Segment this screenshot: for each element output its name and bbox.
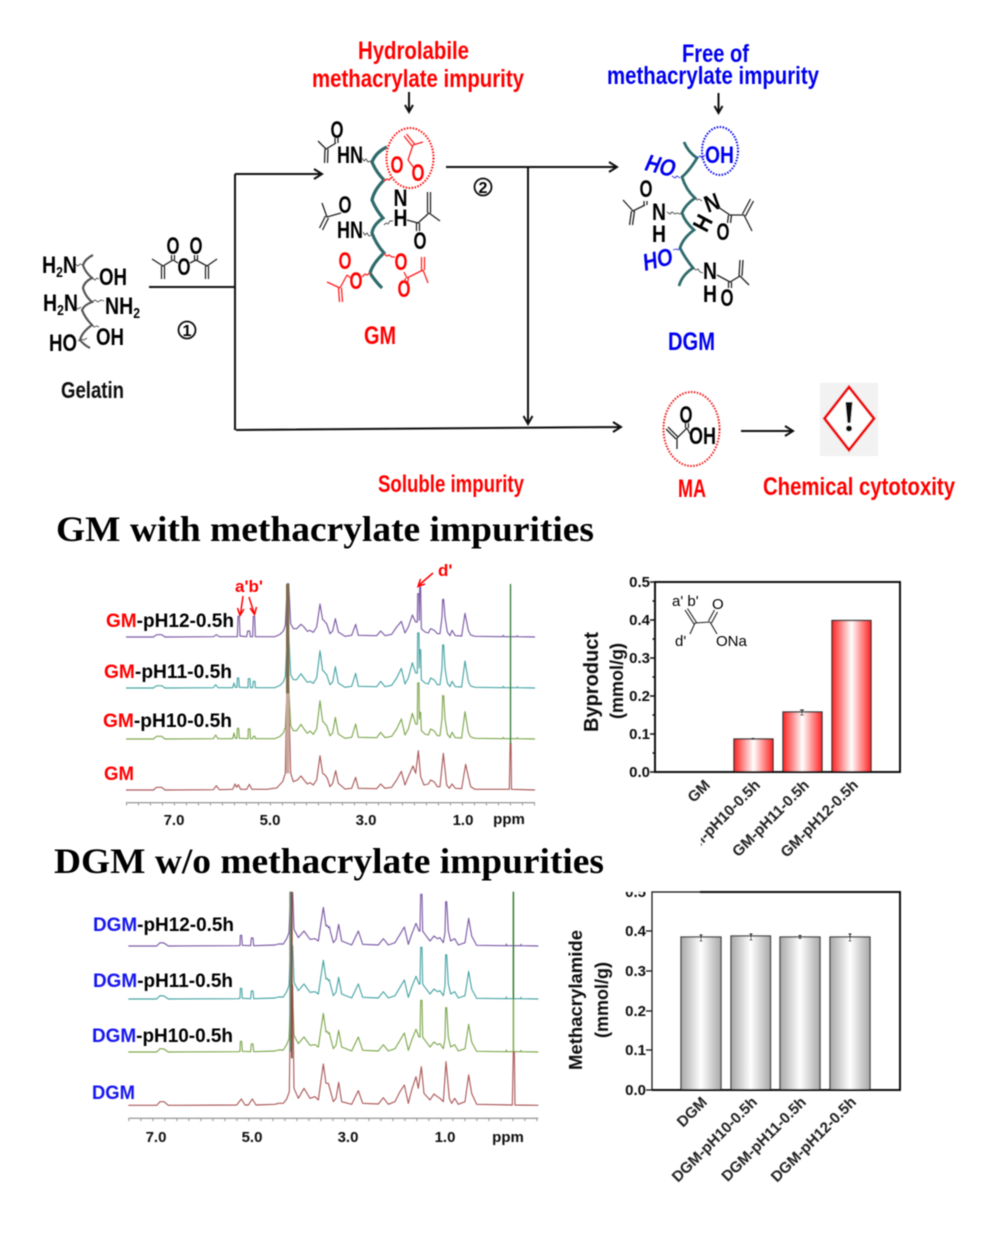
inset: sodium methacrylate structure: O: [712, 596, 724, 613]
chart: byproduct bar chart: [581, 574, 900, 861]
molecule: DGM: N: [703, 258, 717, 285]
spectrum: DGM-pH10: [128, 999, 538, 1052]
chart: DGM NMR spectra: [92, 892, 538, 1146]
molecule: methacrylic anhydride: O: [190, 233, 202, 260]
y-axis tick labels: 0.3: [625, 963, 646, 980]
y-axis tick labels: [629, 574, 651, 781]
x-axis labels: DGM-pH12-0.5h: [768, 1094, 860, 1186]
y-axis tick labels: 0.0: [625, 1082, 646, 1099]
chart: GM NMR spectra: [103, 561, 535, 829]
molecule: gelatin: H: [42, 252, 59, 279]
callout: free hydroxyl circle: [702, 127, 738, 175]
x-axis labels: GM-pH10-0.5h: [680, 777, 764, 861]
callout: free hydroxyl circle: OH: [705, 142, 734, 169]
y-axis title: (mmol/g): [592, 962, 612, 1038]
molecule: DGM: [623, 127, 754, 312]
y-axis tick labels: 0.2: [629, 688, 650, 705]
icon: step 1: 1: [183, 323, 192, 340]
y-axis title: (mmol/g): [607, 643, 627, 719]
axis labels: ppm scale: 1.0: [435, 1129, 455, 1146]
y-axis tick labels: [625, 884, 647, 1099]
heading: hydrolabile methacrylate impurity: Hydrolabile: [358, 37, 469, 65]
inset: sodium methacrylate structure: d': [675, 633, 686, 650]
molecule: gelatin: N: [64, 290, 78, 317]
y-axis title: Byproduct: [581, 632, 603, 732]
label: GM-pH11-0.5h: GM-pH11-0.5h: [104, 661, 232, 683]
molecule: DGM: N: [701, 188, 724, 219]
spectrum: DGM-pH11: [128, 946, 538, 999]
molecule: DGM: O: [720, 285, 734, 312]
molecule: gelatin: [42, 252, 140, 357]
label: DGM-pH12-0.5h: DGM-pH12-0.5h: [93, 914, 234, 936]
callout: hydrolabile ester circle: [384, 128, 434, 188]
molecule: DGM: O: [716, 219, 730, 246]
y-axis title: Methacrylamide: [566, 930, 586, 1070]
bars: [734, 620, 871, 772]
molecule: gelatin: N: [63, 252, 77, 279]
title: GM with methacrylate impurities: GM with methacrylate impurities: [56, 509, 594, 549]
callout: hydrolabile ester circle: O: [412, 160, 424, 187]
y-axis tick labels: 0.4: [625, 923, 647, 940]
axis labels: ppm scale: 7.0: [164, 812, 184, 829]
y-axis tick labels: 0.3: [629, 650, 650, 667]
heading: free of methacrylate impurity: methacrylate impurity: [607, 62, 819, 90]
annotation: d' peak: [418, 561, 452, 586]
y-axis tick labels: 0.1: [625, 1042, 646, 1059]
icon: step 2: 2: [479, 180, 488, 197]
axis labels: ppm scale: ppm: [493, 811, 525, 828]
label: Gelatin: Gelatin: [61, 377, 124, 403]
molecule: DGM: HO: [643, 150, 678, 183]
molecule: methacrylic anhydride: [152, 233, 217, 281]
molecule: GM: H: [394, 205, 408, 232]
molecule: methacrylic anhydride: O: [166, 233, 180, 260]
molecule: methacrylic acid in circle: OH: [689, 423, 716, 450]
molecule: methacrylic acid in circle: [664, 392, 720, 466]
spectrum: GM-pH12: [126, 584, 535, 637]
label: MA: MA: [678, 475, 706, 503]
molecule: GM: O: [338, 192, 352, 219]
molecule: gelatin: H: [43, 290, 60, 317]
axis labels: ppm scale: 5.0: [260, 812, 280, 829]
y-axis tick labels: 0.2: [625, 1003, 646, 1020]
label: DGM-pH10-0.5h: DGM-pH10-0.5h: [92, 1025, 233, 1047]
heading: free of methacrylate impurity: Free of: [682, 40, 750, 68]
molecule: gelatin: OH: [96, 324, 124, 351]
icon: step 1: [178, 322, 196, 340]
axis labels: ppm scale: 3.0: [356, 812, 376, 829]
label: GM: GM: [104, 763, 134, 785]
arrow: hydrolabile label to GM: [405, 92, 413, 112]
label: DGM-pH11-0.5h: DGM-pH11-0.5h: [93, 970, 233, 992]
label: soluble impurity: Soluble impurity: [378, 471, 525, 498]
title: DGM without methacrylate impurities: DGM w/o methacrylate impurities: [54, 841, 604, 881]
label: GM-pH12-0.5h: GM-pH12-0.5h: [106, 610, 234, 632]
molecule: GM: O: [338, 248, 352, 275]
annotation: a' b' peaks: [235, 577, 263, 616]
arrow: down to soluble impurity line: [524, 167, 532, 424]
spectrum: GM-pH10: [126, 683, 535, 739]
x-axis labels: GM-pH11-0.5h: [729, 777, 813, 860]
y-axis tick labels: 0.1: [629, 726, 650, 743]
spectrum: DGM-pH12: [128, 893, 538, 946]
label: DGM: DGM: [668, 328, 715, 356]
arrow: MA to cytotoxicity: [741, 426, 793, 436]
molecule: GM: O: [394, 249, 408, 276]
annotation: d' peak: d': [438, 561, 452, 580]
molecule: methacrylic anhydride: O: [178, 254, 190, 281]
spectrum: GM-pH11: [126, 633, 535, 688]
label: GM: GM: [364, 322, 396, 350]
molecule: DGM: HO: [640, 243, 676, 277]
spectrum: GM: [126, 693, 535, 790]
molecule: methacrylic acid in circle: O: [680, 402, 692, 429]
molecule: gelatin: 2: [57, 302, 64, 319]
arrow: GM to DGM: [446, 162, 617, 172]
axis labels: ppm scale: 1.0: [453, 812, 473, 829]
molecule: gelatin: HO: [49, 330, 77, 357]
axis labels: ppm scale: 7.0: [146, 1129, 166, 1146]
spectrum: DGM: [128, 985, 538, 1105]
heading: hydrolabile methacrylate impurity: [312, 37, 524, 93]
molecule: GM: O: [350, 268, 362, 295]
chart: methacrylamide bar chart: [566, 884, 900, 1186]
molecule: GM: N: [394, 185, 408, 212]
molecule: DGM: H: [688, 210, 719, 236]
icon: step 2: [474, 178, 492, 197]
y-axis tick labels: 0.4: [629, 612, 651, 629]
molecule: GM: HN: [337, 217, 363, 244]
label: DGM: DGM: [92, 1082, 135, 1104]
molecule: DGM: H: [652, 221, 666, 248]
heading: hydrolabile methacrylate impurity: methacrylate impurity: [312, 65, 524, 93]
molecule: GM: O: [414, 228, 426, 255]
x-axis labels: DGM: [674, 1094, 711, 1131]
x-axis labels: GM: [685, 777, 714, 806]
arrow: free of impurity label to DGM: [714, 93, 722, 113]
molecule: DGM: O: [640, 176, 652, 203]
x-axis labels: GM-pH12-0.5h: [778, 777, 862, 861]
axis labels: ppm scale: [164, 811, 525, 829]
molecule: GM: O: [330, 117, 344, 144]
x-axis labels: DGM-pH11-0.5h: [718, 1094, 810, 1185]
axis labels: ppm scale: [146, 1129, 524, 1146]
x-axis labels: [669, 1094, 860, 1186]
panel: reaction scheme: [42, 37, 955, 503]
y-axis tick labels: 0.5: [629, 574, 650, 591]
bars: [681, 936, 870, 1090]
y-axis title: [566, 930, 612, 1070]
inset: sodium methacrylate structure: a' b': [672, 593, 699, 610]
molecule: gelatin: OH: [99, 264, 127, 291]
y-axis title: [581, 632, 627, 732]
x-axis labels: [688, 778, 859, 857]
x-axis labels: DGM-pH10-0.5h: [669, 1094, 761, 1186]
arrow: to methacrylic acid: [236, 422, 621, 432]
label: GM-pH10-0.5h: GM-pH10-0.5h: [103, 710, 232, 732]
molecule: gelatin: 2: [56, 264, 63, 281]
axis labels: ppm scale: 3.0: [338, 1129, 358, 1146]
callout: hydrolabile ester circle: O: [390, 152, 404, 179]
molecule: DGM: H: [703, 281, 717, 308]
axis labels: ppm scale: 5.0: [242, 1129, 262, 1146]
arrow: gelatin reaction line to GM: [149, 169, 322, 430]
molecule: gelatin: NH: [105, 293, 140, 320]
y-axis tick labels: 0.5: [625, 884, 646, 901]
annotation: a' b' peaks: a'b': [235, 577, 263, 596]
inset: sodium methacrylate structure: [672, 593, 748, 650]
molecule: gelatin: 2: [133, 305, 140, 322]
heading: free of methacrylate impurity: [607, 40, 819, 90]
molecule: GM: [318, 117, 440, 303]
y-axis tick labels: 0.0: [629, 764, 650, 781]
axis labels: ppm scale: ppm: [492, 1129, 524, 1146]
molecule: DGM: N: [652, 199, 666, 226]
icon: hazard diamond: [820, 383, 878, 456]
molecule: GM: O: [398, 276, 410, 303]
molecule: GM: HN: [337, 142, 363, 169]
inset: sodium methacrylate structure: ONa: [716, 633, 748, 650]
